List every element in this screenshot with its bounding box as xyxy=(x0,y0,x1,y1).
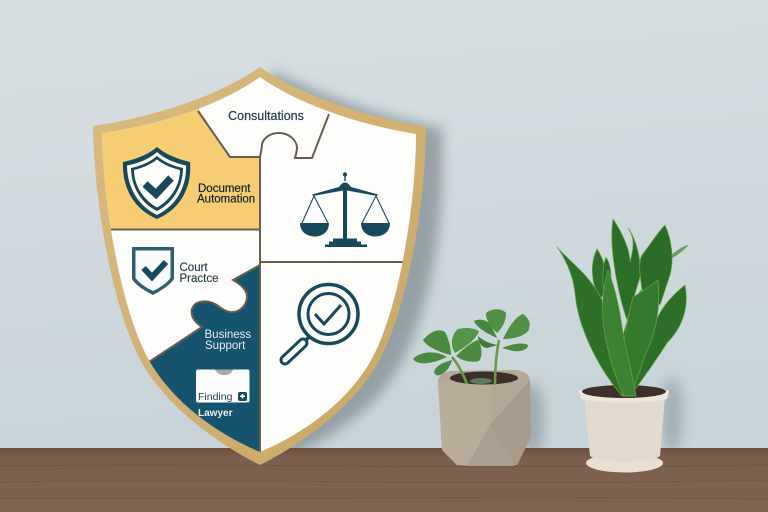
stone pot xyxy=(438,370,531,466)
shield white base xyxy=(102,77,416,452)
panel: document automation xyxy=(95,108,260,230)
label: court practice: Practce xyxy=(180,273,218,285)
label: business support xyxy=(204,329,251,352)
puzzle dividers xyxy=(100,111,410,452)
label: business support: Support xyxy=(205,340,246,352)
icon: large shield with check xyxy=(123,147,190,219)
plant: tall green plant in white pot xyxy=(557,219,688,472)
saucer xyxy=(586,454,663,472)
icon: scales of justice xyxy=(300,172,390,247)
leaves and stems xyxy=(413,309,530,385)
card: finding lawyer: Finding xyxy=(198,391,233,403)
pot rim xyxy=(579,384,669,403)
label: document automation: Automation xyxy=(197,194,255,206)
soil xyxy=(582,385,666,398)
shadow of stone pot xyxy=(526,380,549,448)
label: business support: Business xyxy=(204,329,251,341)
label: court practice xyxy=(180,262,218,285)
card: finding lawyer: Lawyer xyxy=(198,408,233,419)
plant: small green plant in stone pot xyxy=(413,309,544,466)
icon: small shield with check xyxy=(132,247,174,295)
wooden shelf xyxy=(0,448,768,512)
leaves xyxy=(557,219,688,396)
label: document automation: Document xyxy=(198,183,251,195)
pot body xyxy=(584,396,665,461)
label: court practice: Court xyxy=(180,262,208,274)
card: finding lawyer xyxy=(196,370,250,419)
heading: consultations: Consultations xyxy=(228,109,304,123)
shield shadow on wall xyxy=(272,70,443,462)
shadow of white pot xyxy=(661,377,683,453)
icon: magnifying glass with check xyxy=(285,284,358,360)
shield gold frame xyxy=(93,67,426,465)
panel: business support xyxy=(149,265,260,470)
label: document automation xyxy=(197,183,255,206)
shield xyxy=(93,67,426,470)
